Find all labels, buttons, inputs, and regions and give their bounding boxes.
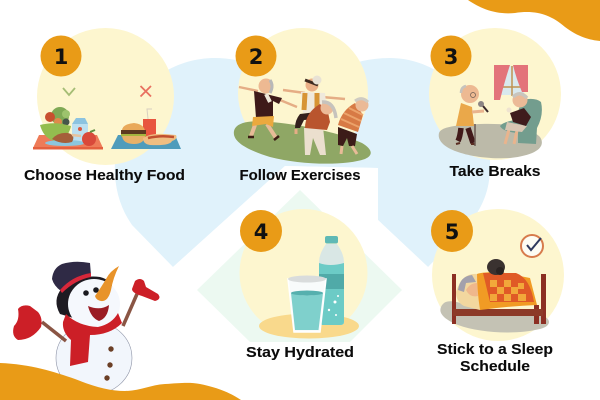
panel: step 2 exercise (234, 28, 371, 184)
mouth (88, 305, 109, 321)
unhealthy food tray (111, 109, 181, 149)
snowman body (56, 322, 132, 394)
heading: choose healthy food: Choose Healthy Food (24, 167, 185, 184)
buttons (104, 346, 114, 381)
right mitten (132, 279, 159, 301)
green ground (234, 121, 371, 164)
exerciser one (239, 78, 297, 140)
scarf (63, 313, 122, 366)
heading: stick to a sleep schedule: Stick to a Sleep (437, 341, 553, 358)
number badge 4: 4 (254, 220, 268, 244)
icon: water bottle (319, 236, 344, 325)
icon: clock (521, 235, 543, 257)
number badge 2 (236, 36, 276, 76)
background heart shape (115, 58, 490, 400)
heading: stick to a sleep schedule (437, 341, 553, 375)
heading: follow exercises: Follow Exercises (240, 167, 360, 184)
icon: cross mark (140, 86, 151, 96)
grey floor (439, 124, 542, 158)
snowman (13, 262, 159, 394)
left arm (42, 322, 66, 341)
orange blob bottom left (0, 363, 241, 400)
background green diamond (197, 190, 402, 342)
heading: stay hydrated: Stay Hydrated (246, 344, 354, 361)
eyes (83, 287, 99, 296)
left mitten (13, 305, 42, 340)
healthy food tray (33, 107, 103, 150)
right arm (123, 294, 137, 326)
number badge 3: 3 (444, 45, 458, 69)
exerciser two (283, 76, 345, 134)
number badge 5 (431, 210, 473, 252)
heading: take breaks: Take Breaks (450, 163, 540, 180)
panel: step 4 hydration (240, 209, 368, 361)
number badge 5: 5 (445, 220, 459, 244)
number badge 3 (430, 36, 472, 76)
yellow circle 2 (238, 28, 368, 158)
panel: step 3 breaks (429, 28, 561, 180)
number badge 1 (40, 36, 82, 76)
old man with microphone (456, 85, 488, 146)
old woman in armchair (500, 92, 542, 144)
number badge 4 (240, 210, 282, 252)
tan shadow ellipse (259, 314, 359, 338)
hat brim (56, 276, 113, 320)
grey shadow (440, 301, 549, 332)
yellow circle 3 (429, 28, 561, 160)
yellow circle 5 (432, 209, 564, 341)
yellow circle 4 (240, 209, 368, 337)
exerciser three (304, 102, 336, 155)
heading: stick to a sleep schedule: Schedule (460, 358, 530, 375)
hat crown (52, 262, 91, 293)
number badge 2: 2 (249, 45, 263, 69)
yellow circle 1 (37, 28, 174, 165)
icon: glass of water (288, 276, 326, 332)
exerciser four (338, 98, 368, 154)
head (68, 279, 120, 329)
icon: check mark (63, 88, 75, 95)
panel: step 1 food (24, 28, 185, 184)
panel: step 5 sleep (431, 209, 564, 375)
bed with sleeper (452, 259, 546, 324)
window with curtains (494, 65, 528, 100)
number badge 1: 1 (54, 45, 68, 69)
orange blob top right (468, 0, 600, 41)
carrot nose (95, 266, 119, 301)
